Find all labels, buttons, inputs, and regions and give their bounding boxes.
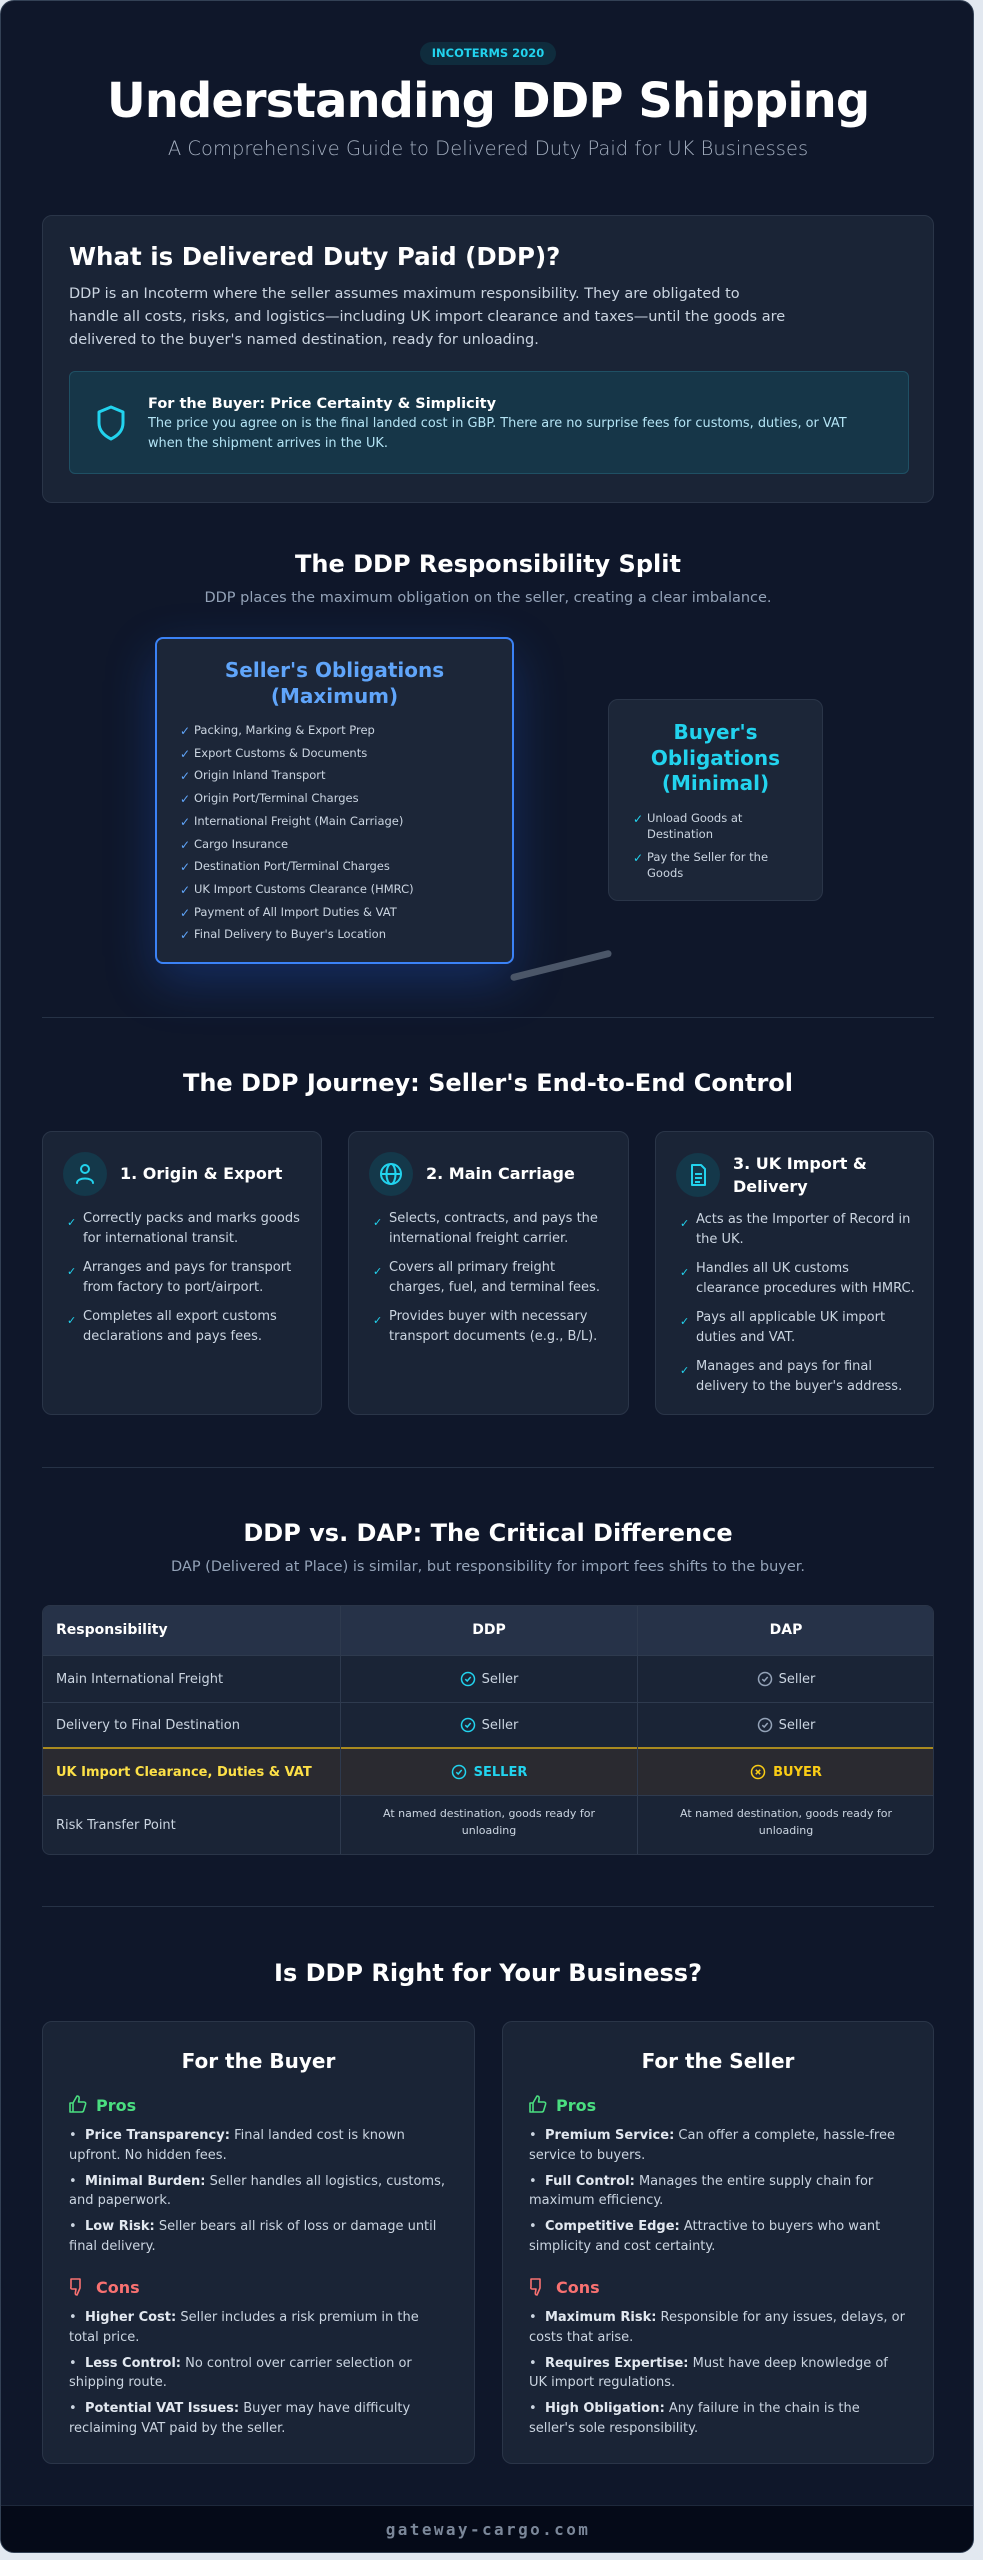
panel: buyer obligations: ✓ (633, 851, 643, 865)
list: seller cons (529, 2310, 905, 2436)
list: origin steps: for international transit. (83, 1230, 238, 1246)
icon: person (63, 1152, 107, 1196)
panel: seller obligations: ✓ (180, 838, 190, 852)
balance beam (510, 950, 612, 981)
list: buyer cons: reclaiming VAT paid by the seller. (69, 2420, 285, 2436)
panel: UK import & delivery (655, 1131, 934, 1415)
heading: DDP vs DAP: DDP vs. DAP: The Critical Difference (243, 1519, 733, 1547)
text block: DDP definition: handle all costs, risks, and logistics—including UK import clearance and taxes—until the goods are (69, 309, 785, 325)
panel: seller obligations: ✓ (180, 747, 190, 761)
row: final delivery: Delivery to Final Destination (56, 1718, 240, 1732)
panel: main carriage (348, 1131, 629, 1415)
table: DDP vs DAP comparison: DAP (770, 1622, 802, 1638)
list: seller obligations: Payment of All Import Duties & VAT (194, 905, 397, 919)
list: import steps (680, 1212, 915, 1394)
icon: globe (369, 1152, 413, 1196)
footer (1, 2505, 975, 2554)
list: import steps: Handles all UK customs (696, 1261, 849, 1276)
list: buyer pros: • Minimal Burden: Seller handles all logistics, customs, (69, 2174, 445, 2188)
heading: is DDP right: Is DDP Right for Your Business? (274, 1959, 702, 1987)
list: import steps: Manages and pays for final (696, 1359, 872, 1374)
heading: buyer obligations: Buyer's (674, 720, 757, 744)
list: carriage steps: Provides buyer with necessary (389, 1309, 587, 1324)
list: origin steps: Correctly packs and marks goods (83, 1211, 300, 1226)
list: seller pros: • Full Control: Manages the entire supply chain for (529, 2174, 873, 2188)
list: buyer obligations (633, 811, 768, 880)
list: seller obligations: Cargo Insurance (194, 836, 288, 850)
callout text: when the shipment arrives in the UK. (148, 436, 388, 451)
panel: UK import & delivery: ✓ (680, 1315, 689, 1328)
list: import steps: Acts as the Importer of Record in (696, 1212, 910, 1227)
row: UK import clearance (highlight): UK Import Clearance, Duties & VAT (56, 1764, 312, 1780)
panel: for the buyer (42, 2021, 475, 2464)
list: seller cons: • Requires Expertise: Must have deep knowledge of (529, 2356, 888, 2370)
list: seller cons: costs that arise. (529, 2330, 633, 2344)
card title: 1. Origin & Export (120, 1164, 282, 1183)
list: seller obligations: Origin Port/Terminal Charges (194, 791, 359, 805)
pros heading (529, 2095, 596, 2115)
card title: For the Buyer (182, 2049, 335, 2073)
list: seller obligations (180, 723, 414, 942)
panel: origin & export: ✓ (67, 1265, 76, 1278)
panel: main carriage: ✓ (373, 1265, 382, 1278)
panel: seller obligations: ✓ (180, 906, 190, 920)
text block: DDP definition (69, 286, 785, 348)
list: origin steps: Completes all export customs (83, 1309, 277, 1324)
icon: document (676, 1153, 720, 1197)
list: carriage steps: international freight carrier. (389, 1230, 568, 1246)
card title (733, 1154, 867, 1196)
list: seller cons: • Maximum Risk: Responsible for any issues, delays, or (529, 2310, 905, 2325)
panel: seller obligations (155, 637, 514, 964)
subheading: responsibility split: DDP places the maximum obligation on the seller, creating a clear imbalance. (204, 590, 772, 606)
text block: DDP definition: DDP is an Incoterm where the seller assumes maximum responsibility. They are obligated to (69, 286, 740, 302)
list: seller cons: UK import regulations. (529, 2375, 675, 2390)
pros heading (69, 2095, 136, 2115)
list: seller pros: service to buyers. (529, 2148, 645, 2162)
heading: seller obligations (225, 658, 444, 708)
list: buyer cons: • Higher Cost: Seller includes a risk premium in the (69, 2310, 419, 2325)
list: carriage steps: Selects, contracts, and pays the (389, 1211, 598, 1226)
callout text (148, 416, 847, 451)
list: buyer pros: final delivery. (69, 2238, 156, 2254)
panel: seller obligations: ✓ (180, 815, 190, 829)
callout title: For the Buyer: Price Certainty & Simplicity (148, 396, 496, 412)
table: DDP vs DAP comparison: At named destination, goods ready for (383, 1807, 595, 1820)
heading: seller obligations: (Maximum) (271, 684, 398, 708)
table: DDP vs DAP comparison: SELLER (474, 1764, 527, 1780)
pros heading: Pros (96, 2096, 136, 2115)
table: DDP vs DAP comparison: DDP (472, 1622, 506, 1638)
card title: 3. UK Import & (733, 1154, 867, 1173)
text block: DDP definition: delivered to the buyer's named destination, ready for unloading. (69, 332, 539, 348)
list: import steps: clearance procedures with HMRC. (696, 1280, 915, 1296)
list: carriage steps (373, 1211, 600, 1344)
cons heading: Cons (96, 2278, 140, 2297)
list: import steps: Pays all applicable UK import (696, 1310, 885, 1325)
panel: seller obligations: ✓ (180, 860, 190, 874)
panel: UK import & delivery: ✓ (680, 1364, 689, 1377)
table: DDP vs DAP comparison: BUYER (773, 1764, 822, 1780)
panel: buyer obligations: ✓ (633, 812, 643, 826)
panel: UK import & delivery: ✓ (680, 1266, 689, 1279)
panel: UK import & delivery: ✓ (680, 1217, 689, 1230)
table: DDP vs DAP comparison: Seller (779, 1672, 815, 1686)
list: seller pros (529, 2128, 895, 2254)
list: carriage steps: transport documents (e.g., B/L). (389, 1328, 597, 1344)
panel: buyer obligations (608, 699, 823, 901)
list: import steps: duties and VAT. (696, 1330, 795, 1344)
list: carriage steps: Covers all primary freight (389, 1260, 555, 1275)
list: seller obligations: Destination Port/Terminal Charges (194, 859, 390, 873)
panel: main carriage: ✓ (373, 1216, 382, 1229)
table: DDP vs DAP comparison: Seller (482, 1672, 518, 1686)
badge: incoterms 2020 (420, 42, 556, 65)
table: DDP vs DAP comparison (42, 1605, 934, 1855)
list: carriage steps: charges, fuel, and terminal fees. (389, 1280, 600, 1294)
list: seller cons: • High Obligation: Any failure in the chain is the (529, 2401, 860, 2416)
list: seller obligations: Export Customs & Documents (194, 746, 367, 760)
cons heading: Cons (556, 2278, 600, 2297)
card title: 2. Main Carriage (426, 1164, 575, 1183)
table: DDP vs DAP comparison: unloading (759, 1824, 813, 1836)
panel: seller obligations: ✓ (180, 769, 190, 783)
list: buyer pros: • Price Transparency: Final landed cost is known (69, 2128, 405, 2143)
panel: seller obligations: ✓ (180, 792, 190, 806)
list: origin steps (67, 1211, 300, 1344)
badge: incoterms 2020: INCOTERMS 2020 (432, 46, 544, 60)
heading: DDP journey: The DDP Journey: Seller's End-to-End Control (183, 1069, 793, 1097)
heading: seller obligations: Seller's Obligations (225, 658, 444, 682)
panel: for the seller (502, 2021, 934, 2464)
table: DDP vs DAP comparison: Seller (779, 1718, 815, 1732)
table: DDP vs DAP comparison: Seller (482, 1718, 518, 1732)
row: main freight: Main International Freight (56, 1672, 223, 1686)
list: seller obligations: Origin Inland Transport (194, 768, 326, 782)
list: buyer obligations: Pay the Seller for the (647, 850, 768, 864)
list: buyer pros: and paperwork. (69, 2193, 171, 2208)
panel: origin & export: ✓ (67, 1314, 76, 1327)
list: buyer obligations: Goods (647, 866, 683, 880)
panel: what is DDP (42, 215, 934, 503)
list: seller pros: • Competitive Edge: Attractive to buyers who want (529, 2219, 880, 2234)
panel: seller obligations: ✓ (180, 724, 190, 738)
heading: responsibility split: The DDP Responsibility Split (295, 550, 681, 578)
heading: buyer obligations: (Minimal) (662, 771, 769, 795)
list: seller obligations: International Freight (Main Carriage) (194, 814, 403, 828)
table header: Responsibility (56, 1622, 168, 1638)
list: buyer obligations: Unload Goods at (647, 811, 742, 825)
cons heading (70, 2278, 140, 2297)
heading: buyer obligations: Obligations (651, 746, 780, 770)
panel: origin & export: ✓ (67, 1216, 76, 1229)
list: buyer obligations: Destination (647, 827, 713, 841)
card title: For the Seller (642, 2049, 794, 2073)
callout: buyer price certainty (69, 371, 909, 474)
title: Understanding DDP Shipping (107, 73, 869, 129)
list: seller pros: maximum efficiency. (529, 2193, 663, 2208)
icon: shield (98, 406, 124, 440)
list: seller obligations: UK Import Customs Clearance (HMRC) (194, 882, 414, 896)
list: origin steps: declarations and pays fees. (83, 1328, 262, 1344)
list: seller obligations: Final Delivery to Buyer's Location (194, 927, 386, 941)
list: buyer cons: total price. (69, 2330, 139, 2344)
panel: seller obligations: ✓ (180, 883, 190, 897)
row: risk transfer: Risk Transfer Point (56, 1818, 176, 1832)
heading: buyer obligations (651, 720, 780, 795)
cons heading (530, 2278, 600, 2297)
table: DDP vs DAP comparison: At named destination, goods ready for (680, 1807, 892, 1820)
callout text: The price you agree on is the final landed cost in GBP. There are no surprise fees for customs, duties, or VAT (148, 416, 847, 431)
list: buyer cons: • Potential VAT Issues: Buyer may have difficulty (69, 2401, 410, 2416)
list: buyer pros: upfront. No hidden fees. (69, 2148, 227, 2162)
list: buyer pros (69, 2128, 445, 2254)
list: seller pros: simplicity and cost certainty. (529, 2238, 715, 2254)
list: buyer pros: • Low Risk: Seller bears all risk of loss or damage until (69, 2219, 436, 2234)
list: import steps: the UK. (696, 1232, 744, 1246)
list: buyer cons: shipping route. (69, 2375, 167, 2390)
list: seller obligations: Packing, Marking & Export Prep (194, 723, 375, 737)
panel: seller obligations: ✓ (180, 928, 190, 942)
panel: main carriage: ✓ (373, 1314, 382, 1327)
panel: origin & export (42, 1131, 322, 1415)
heading: what is DDP: What is Delivered Duty Paid (DDP)? (69, 242, 560, 271)
table: DDP vs DAP comparison: unloading (462, 1824, 516, 1836)
subheading: DDP vs DAP: DAP (Delivered at Place) is similar, but responsibility for import fees shifts to the buyer. (171, 1559, 805, 1575)
list: origin steps: Arranges and pays for transport (83, 1260, 291, 1275)
card title: Delivery (733, 1177, 808, 1196)
list: buyer cons: • Less Control: No control over carrier selection or (69, 2356, 412, 2370)
list: origin steps: from factory to port/airport. (83, 1280, 263, 1294)
list: import steps: delivery to the buyer's address. (696, 1378, 902, 1394)
list: buyer cons (69, 2310, 419, 2436)
pros heading: Pros (556, 2096, 596, 2115)
list: seller cons: seller's sole responsibility. (529, 2420, 698, 2436)
list: seller pros: • Premium Service: Can offer a complete, hassle-free (529, 2128, 895, 2143)
subtitle: A Comprehensive Guide to Delivered Duty Paid for UK Businesses (168, 137, 808, 160)
footer: gateway-cargo.com (386, 2520, 590, 2539)
